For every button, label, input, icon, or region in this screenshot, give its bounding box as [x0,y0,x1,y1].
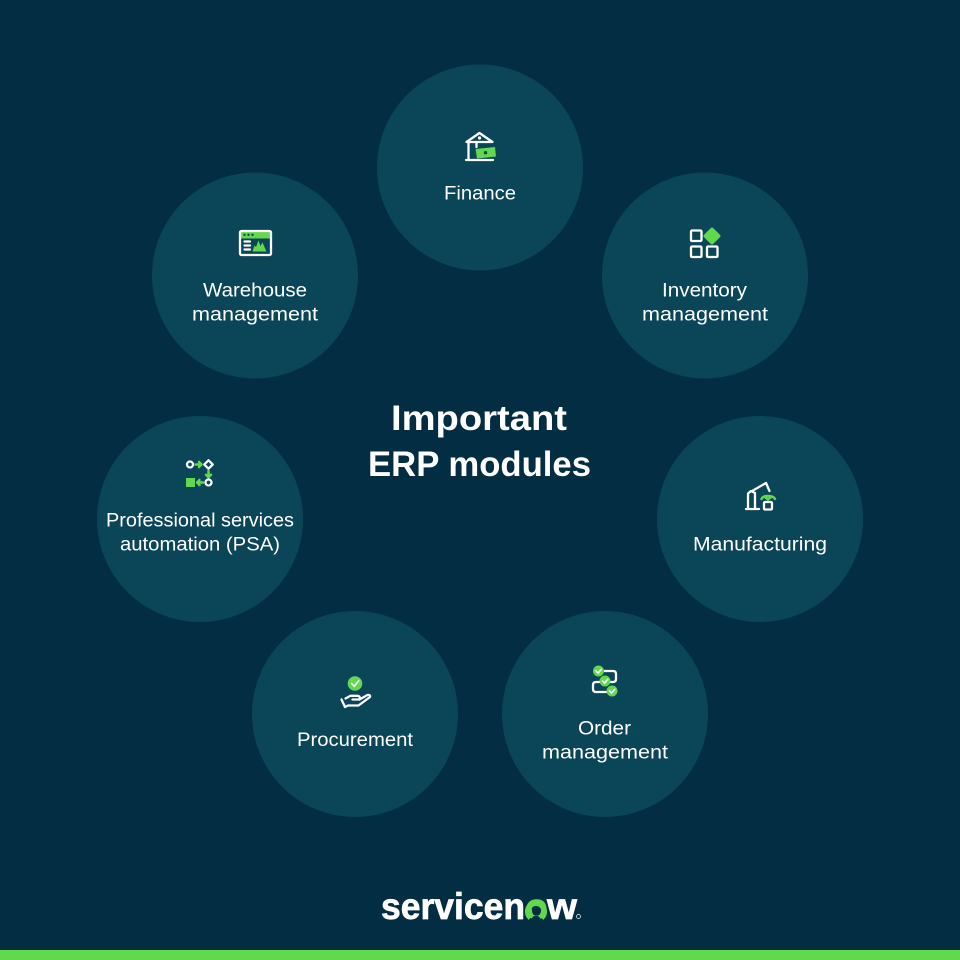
title: ERP modules [368,445,591,484]
label: Procurement: Procurement [297,730,414,751]
label: Inventory management [642,280,769,326]
icon: hand with check [342,676,370,707]
panel: Finance [377,64,583,270]
label: Finance: Finance [444,184,516,204]
logo: ServiceNow: o [525,886,548,927]
panel: Warehouse management [152,172,358,378]
label: Inventory management: management [642,304,769,326]
logo: ServiceNow: w [546,886,577,927]
label: Order management [542,718,669,764]
title [368,399,591,484]
panel: Order management [502,611,708,817]
icon: order checklist path [593,666,618,696]
panel: Manufacturing [657,416,863,622]
label: Order management: management [542,742,669,764]
label: Professional services automation (PSA) [106,510,294,556]
label: Warehouse management: management [192,304,319,326]
logo: ServiceNow: servicen [381,886,525,927]
panel: Professional services automation [97,416,303,622]
label: Order management: Order [578,718,632,740]
icon: finance bank with banknote [466,133,496,160]
icon: inventory blocks [691,227,721,257]
icon: process flow [186,460,213,487]
label: Professional services automation (PSA): automation (PSA) [120,534,280,556]
label: Warehouse management [192,280,319,326]
label: Manufacturing: Manufacturing [693,534,827,556]
icon: factory crane [746,483,775,510]
label: Professional services automation (PSA): Professional services [106,510,294,532]
title: Important [391,399,567,438]
panel: Inventory management [602,172,808,378]
icon: warehouse dashboard window [240,231,271,255]
green footer bar [0,950,960,960]
label: Inventory management: Inventory [662,280,748,302]
panel: Procurement [252,611,458,817]
label: Warehouse management: Warehouse [203,280,307,302]
